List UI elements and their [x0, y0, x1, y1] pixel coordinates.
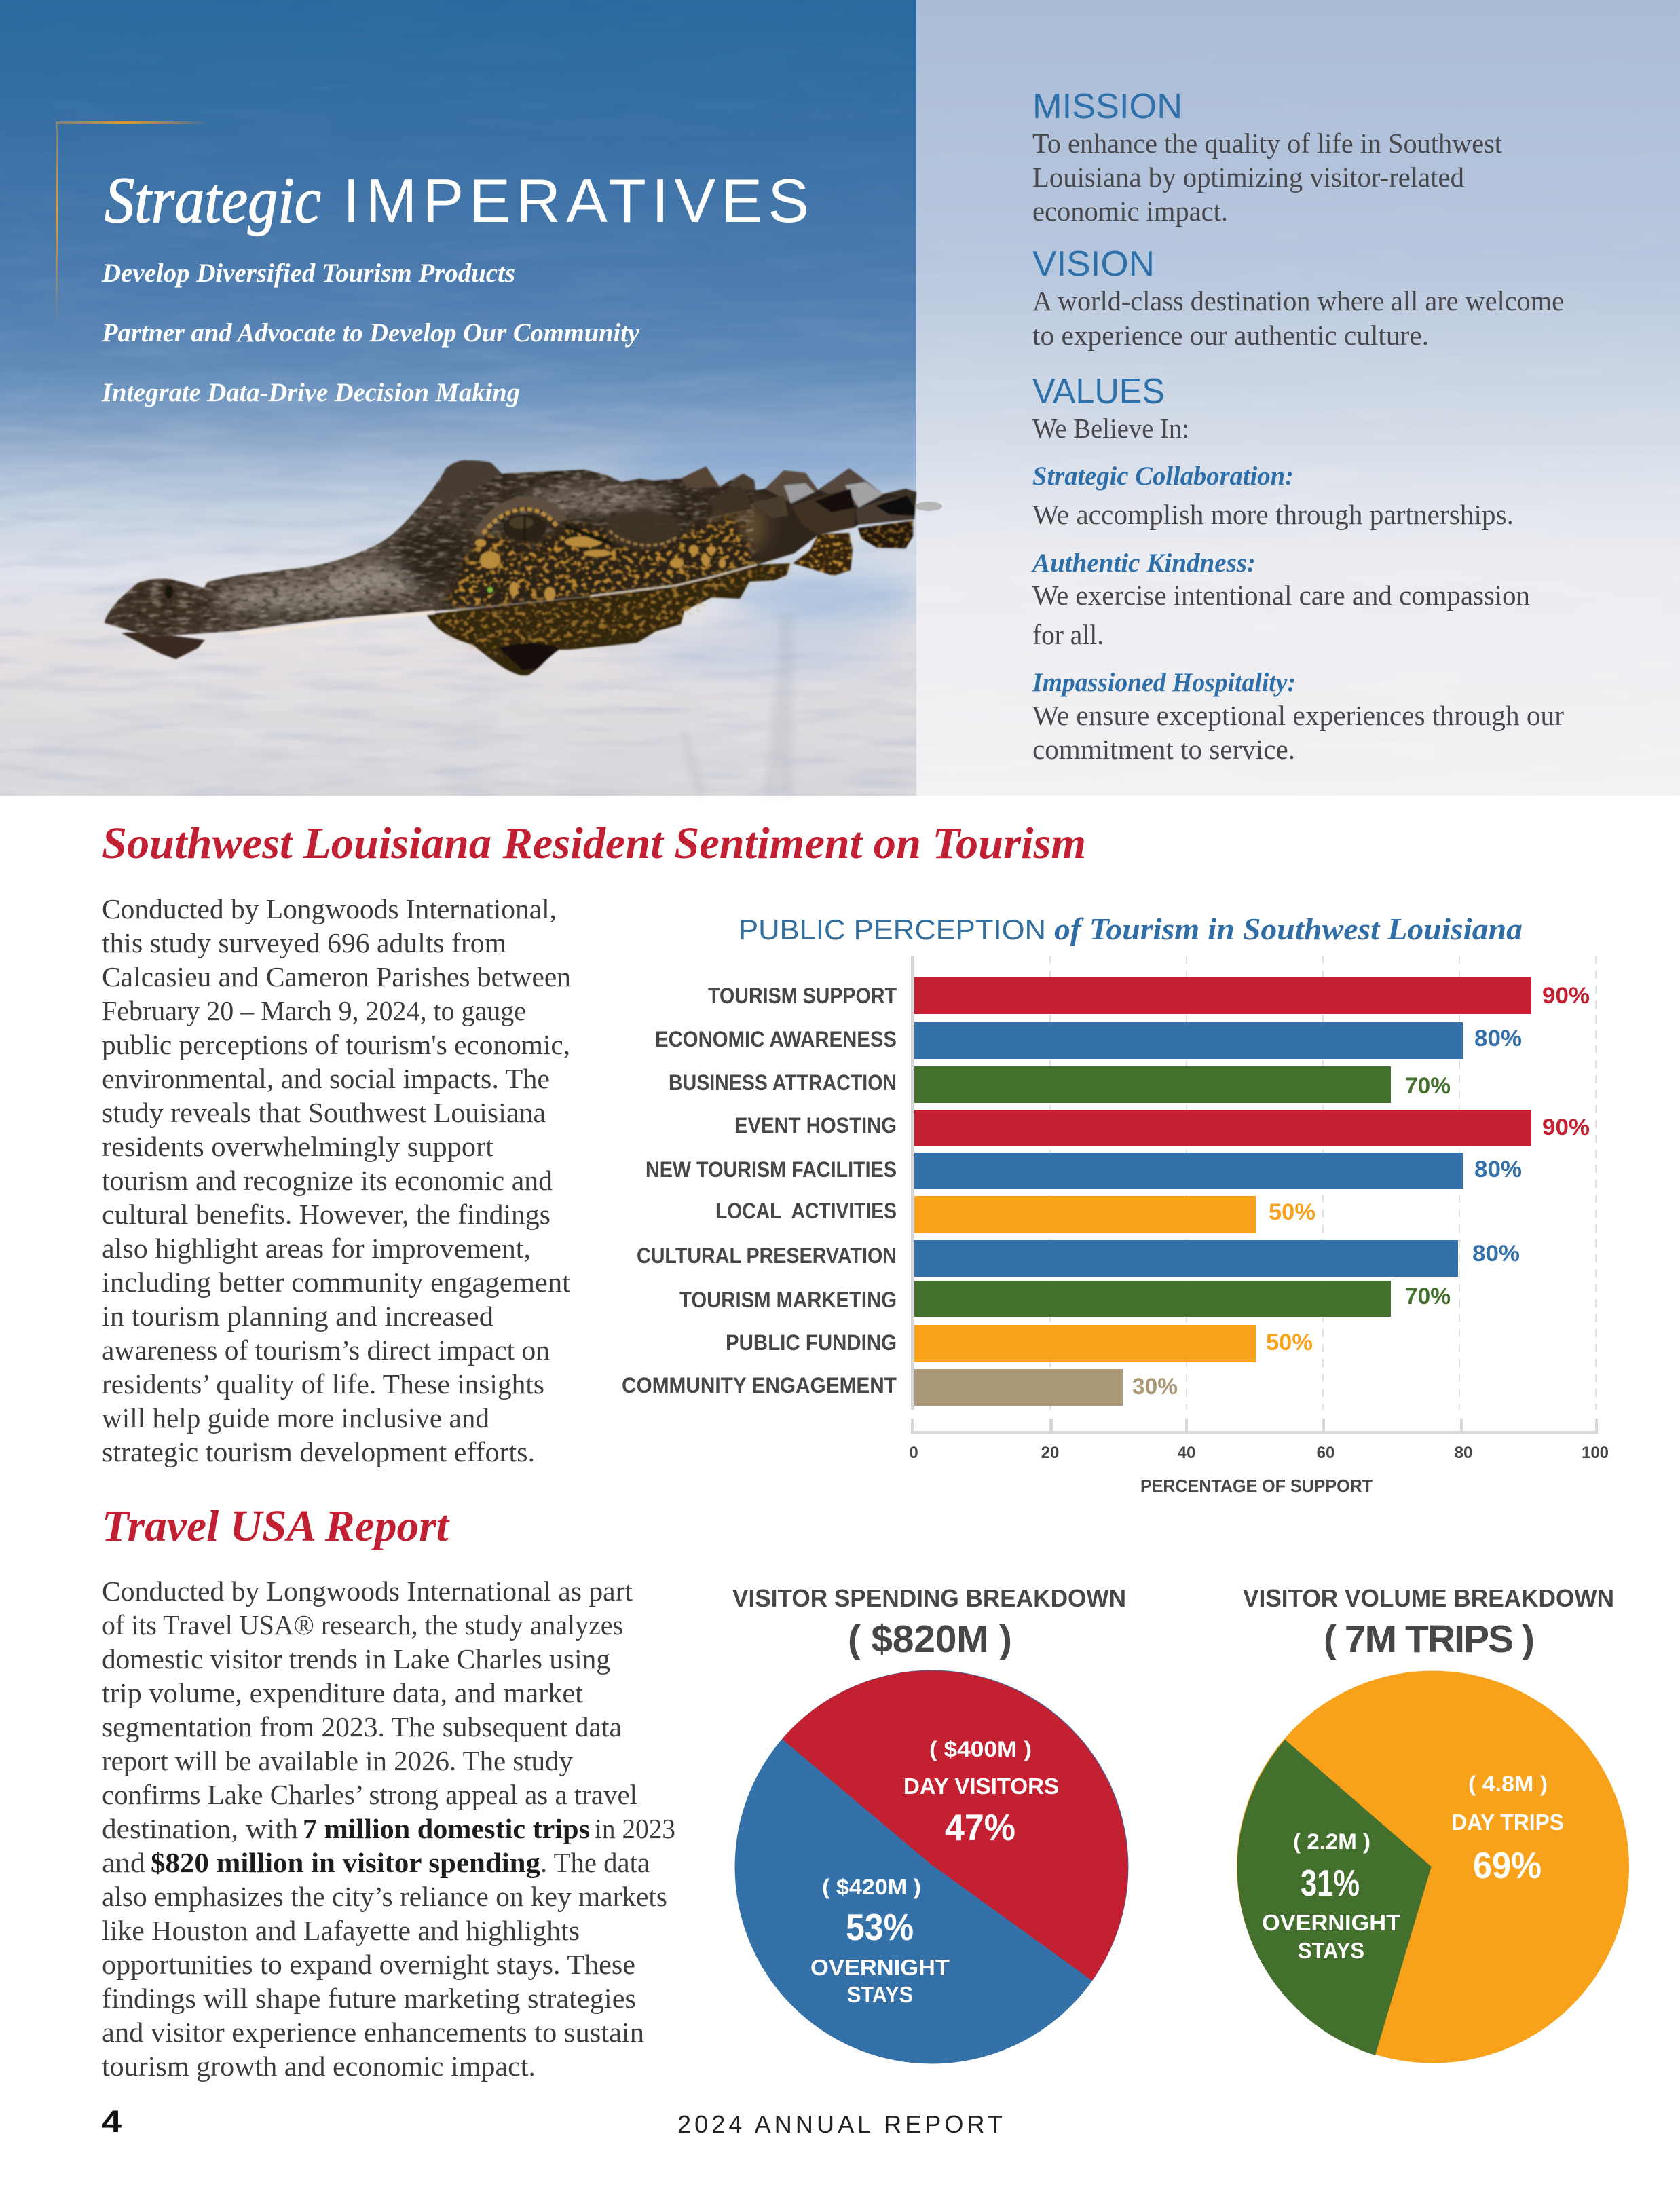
gold eyelid dots	[483, 509, 558, 534]
chart heading: ( $820M )	[848, 1617, 1012, 1661]
ear bump	[605, 509, 682, 550]
reflection of rear scutes	[793, 533, 853, 576]
axis tick labels: 60	[1317, 1444, 1334, 1462]
label: day visitors: 47%	[945, 1806, 1015, 1848]
text block: travel usa study: report will be available in 2026. The study	[102, 1745, 573, 1776]
reed reflections	[679, 615, 793, 796]
mid scute 2	[753, 495, 788, 518]
bars	[914, 977, 1531, 1406]
heading: resident sentiment: Southwest Louisiana Resident Sentiment on Tourism	[102, 819, 1086, 868]
water background left	[0, 0, 916, 796]
mid scute 1	[706, 485, 753, 514]
value labels: 90%	[1542, 1115, 1590, 1140]
category labels: COMMUNITY ENGAGEMENT	[622, 1373, 897, 1398]
label: overnight stays: OVERNIGHT	[1262, 1910, 1400, 1935]
chart title	[739, 912, 1523, 946]
droplet ring on water	[915, 502, 942, 511]
text block: travel usa study: opportunities to expand overnight stays. These	[102, 1949, 635, 1980]
text block: resident sentiment study: public perceptions of tourism's economic,	[102, 1029, 570, 1060]
hide texture streaks	[102, 455, 753, 638]
gold mottling on reflection	[428, 560, 794, 658]
value labels: 80%	[1474, 1157, 1522, 1182]
waterline highlight	[591, 565, 757, 596]
chart heading: VISITOR SPENDING BREAKDOWN	[732, 1584, 1126, 1612]
pie chart: visitor spending	[732, 1584, 1128, 2063]
text block: resident sentiment study: will help guide more inclusive and	[102, 1402, 489, 1434]
label: overnight stays: STAYS	[1298, 1938, 1364, 1963]
imperatives list: Partner and Advocate to Develop Our Community	[101, 318, 640, 348]
eye	[503, 514, 546, 541]
label: overnight stays: ( 2.2M )	[1293, 1829, 1370, 1854]
imperatives list	[101, 259, 640, 407]
last scute	[855, 495, 914, 525]
chart heading: ( 7M TRIPS )	[1324, 1617, 1535, 1661]
value labels: 70%	[1405, 1284, 1451, 1309]
label: day trips	[1451, 1772, 1564, 1886]
slice: overnight stays	[734, 1670, 1128, 2063]
label: day trips: 69%	[1473, 1844, 1542, 1886]
text block: resident sentiment study	[102, 893, 571, 1467]
axis tick labels: 40	[1178, 1444, 1195, 1462]
label: overnight stays: ( $420M )	[822, 1875, 921, 1899]
text block: resident sentiment study: Calcasieu and Cameron Parishes between	[102, 961, 571, 992]
category labels: EVENT HOSTING	[734, 1113, 897, 1138]
brow bump	[434, 460, 502, 506]
text block: resident sentiment study: in tourism planning and increased	[102, 1301, 493, 1332]
title: Strategic	[105, 164, 321, 236]
shaded hide patches	[102, 455, 767, 638]
chart heading: VISITOR VOLUME BREAKDOWN	[1243, 1584, 1614, 1612]
water background right panel	[916, 0, 1680, 796]
category labels: BUSINESS ATTRACTION	[669, 1070, 897, 1095]
vision: A world-class destination where all are welcome	[1032, 285, 1564, 316]
rear scute 2	[728, 474, 755, 490]
panel: strategic imperatives	[101, 164, 809, 407]
text block: travel usa study	[102, 1575, 675, 2082]
value labels: 80%	[1474, 1026, 1522, 1051]
text block: resident sentiment study: residents’ quality of life. These insights	[102, 1368, 544, 1400]
value labels: 50%	[1266, 1330, 1313, 1355]
brow ridge	[474, 496, 567, 538]
chart heading	[732, 1584, 1126, 1661]
values	[1030, 372, 1564, 765]
rear scute 3	[765, 470, 818, 502]
value labels: 50%	[1269, 1199, 1315, 1225]
values: Authentic Kindness:	[1030, 548, 1256, 578]
text block: travel usa study: destination, with	[102, 1813, 298, 1844]
value labels: 90%	[1542, 983, 1590, 1009]
green fleck	[487, 587, 493, 593]
text block: travel usa study: Conducted by Longwoods International as part	[102, 1575, 633, 1607]
values: VALUES	[1032, 372, 1165, 411]
values: commitment to service.	[1032, 734, 1295, 765]
text block: travel usa study: like Houston and Lafayette and highlights	[102, 1915, 580, 1946]
nostril	[165, 585, 173, 599]
heading corner bracket	[56, 121, 209, 324]
rear scute 1	[681, 466, 720, 488]
label: overnight stays: STAYS	[847, 1982, 913, 2007]
mission	[1032, 87, 1503, 227]
value labels: 80%	[1472, 1241, 1520, 1267]
values: for all.	[1032, 619, 1104, 650]
values: Impassioned Hospitality:	[1032, 668, 1296, 697]
category labels: LOCAL ACTIVITIES	[715, 1199, 897, 1223]
text block: travel usa study: . The data	[540, 1847, 650, 1878]
text block: travel usa study: confirms Lake Charles’ strong appeal as a travel	[102, 1779, 637, 1810]
label: day trips: DAY TRIPS	[1451, 1810, 1564, 1835]
label: day visitors: DAY VISITORS	[903, 1774, 1059, 1799]
reflection dark mouth shadow	[499, 643, 559, 670]
text block: travel usa study: trip volume, expenditure data, and market	[102, 1677, 584, 1708]
slice: overnight stays	[1237, 1740, 1432, 2055]
imperatives list: Integrate Data-Drive Decision Making	[101, 378, 520, 407]
axis tick labels: 100	[1582, 1444, 1609, 1462]
category labels: CULTURAL PRESERVATION	[637, 1243, 897, 1268]
text block: travel usa study: and visitor experience enhancements to sustain	[102, 2017, 644, 2048]
text block: travel usa study: $820 million in visitor spending	[151, 1847, 541, 1878]
text block: travel usa study: domestic visitor trends in Lake Charles using	[102, 1643, 610, 1675]
reflection of head	[426, 563, 790, 675]
text block: resident sentiment study: residents overwhelmingly support	[102, 1131, 494, 1162]
end scute	[886, 489, 916, 498]
rear scute 4	[819, 468, 883, 507]
page number: 4	[102, 2104, 122, 2139]
mission: Louisiana by optimizing visitor-related	[1032, 162, 1464, 193]
vision: VISION	[1032, 244, 1155, 284]
text block: resident sentiment study: this study surveyed 696 adults from	[102, 927, 506, 958]
category labels: TOURISM MARKETING	[679, 1288, 897, 1312]
label: overnight stays: 53%	[846, 1906, 914, 1948]
text block: resident sentiment study: awareness of tourism’s direct impact on	[102, 1334, 550, 1366]
panel: mission, vision, values	[1030, 87, 1564, 765]
mission: economic impact.	[1032, 195, 1228, 227]
title	[105, 164, 809, 236]
imperatives list: Develop Diversified Tourism Products	[101, 259, 515, 288]
chart heading	[1243, 1584, 1614, 1661]
chart title: PUBLIC PERCEPTION	[739, 914, 1046, 946]
values: We ensure exceptional experiences through our	[1032, 700, 1564, 731]
category labels: ECONOMIC AWARENESS	[655, 1027, 897, 1051]
text block: travel usa study: segmentation from 2023. The subsequent data	[102, 1711, 622, 1742]
text block: resident sentiment study: cultural benefits. However, the findings	[102, 1199, 550, 1230]
text block: travel usa study: and	[102, 1847, 145, 1878]
hero photo: alligator in water	[0, 0, 1680, 796]
slice: day visitors	[782, 1670, 1128, 1981]
text block: travel usa study: also emphasizes the city’s reliance on key markets	[102, 1881, 667, 1912]
text block: resident sentiment study: study reveals that Southwest Louisiana	[102, 1097, 546, 1128]
category labels	[622, 984, 897, 1398]
footer: 2024 ANNUAL REPORT	[677, 2110, 1003, 2138]
label: day visitors: ( $400M )	[929, 1737, 1032, 1761]
dark hide texture	[102, 455, 753, 638]
values: We exercise intentional care and compassion	[1032, 580, 1530, 611]
text block: resident sentiment study: environmental, and social impacts. The	[102, 1063, 550, 1094]
bar chart: public perception	[622, 912, 1609, 1496]
gold spots	[475, 536, 726, 601]
text block: resident sentiment study: tourism and recognize its economic and	[102, 1165, 553, 1196]
text block: travel usa study: findings will shape future marketing strategies	[102, 1983, 636, 2014]
vision	[1032, 244, 1564, 351]
gold mottling	[434, 509, 767, 611]
label: day visitors	[903, 1737, 1059, 1848]
axis tick labels	[909, 1444, 1609, 1462]
heading: travel usa report: Travel USA Report	[102, 1501, 450, 1551]
rear scute row	[681, 466, 916, 535]
values: We Believe In:	[1032, 413, 1189, 444]
axis title: PERCENTAGE OF SUPPORT	[1140, 1476, 1373, 1496]
axis tick labels: 20	[1041, 1444, 1059, 1462]
category labels: PUBLIC FUNDING	[726, 1330, 897, 1355]
chart title: of Tourism in Southwest Louisiana	[1054, 912, 1523, 946]
label: overnight stays: OVERNIGHT	[810, 1955, 950, 1980]
axes	[911, 956, 1598, 1434]
value labels: 70%	[1405, 1073, 1451, 1099]
water ripples	[0, 231, 916, 796]
axis tick labels: 80	[1455, 1444, 1472, 1462]
text block: resident sentiment study: February 20 – March 9, 2024, to gauge	[102, 995, 526, 1026]
axis tick labels: 0	[909, 1444, 918, 1462]
blue water reflection patches	[626, 438, 916, 683]
mission: MISSION	[1032, 87, 1182, 126]
values: We accomplish more through partnerships.	[1032, 499, 1514, 530]
label: overnight stays: 31%	[1301, 1862, 1360, 1904]
category labels: TOURISM SUPPORT	[708, 984, 897, 1008]
title: IMPERATIVES	[343, 167, 809, 236]
values: Strategic Collaboration:	[1032, 462, 1294, 491]
vision: to experience our authentic culture.	[1032, 320, 1429, 351]
text block: travel usa study: tourism growth and economic impact.	[102, 2051, 536, 2082]
text block: travel usa study: in 2023	[595, 1813, 675, 1844]
mission: To enhance the quality of life in Southwest	[1032, 128, 1503, 159]
large scute	[791, 489, 855, 535]
value labels	[1132, 983, 1590, 1400]
text block: resident sentiment study: Conducted by Longwoods International,	[102, 893, 557, 924]
slice: day trips	[1237, 1671, 1629, 2063]
category labels: NEW TOURISM FACILITIES	[646, 1157, 897, 1182]
value labels: 30%	[1132, 1374, 1178, 1400]
text block: resident sentiment study: strategic tourism development efforts.	[102, 1436, 535, 1467]
alligator	[102, 455, 916, 675]
label: overnight stays	[1262, 1829, 1400, 1963]
gold patterned cheek base	[434, 509, 767, 611]
label: day trips: ( 4.8M )	[1468, 1772, 1548, 1796]
text block: resident sentiment study: including better community engagement	[102, 1267, 571, 1298]
pie chart: visitor volume	[1237, 1584, 1629, 2063]
alligator body silhouette	[105, 460, 916, 637]
label: overnight stays	[810, 1875, 950, 2007]
text block: travel usa study: of its Travel USA® research, the study analyzes	[102, 1609, 623, 1641]
text block: resident sentiment study: also highlight areas for improvement,	[102, 1233, 531, 1264]
text block: travel usa study: 7 million domestic trips	[303, 1813, 590, 1844]
reflection of nose	[122, 633, 205, 659]
